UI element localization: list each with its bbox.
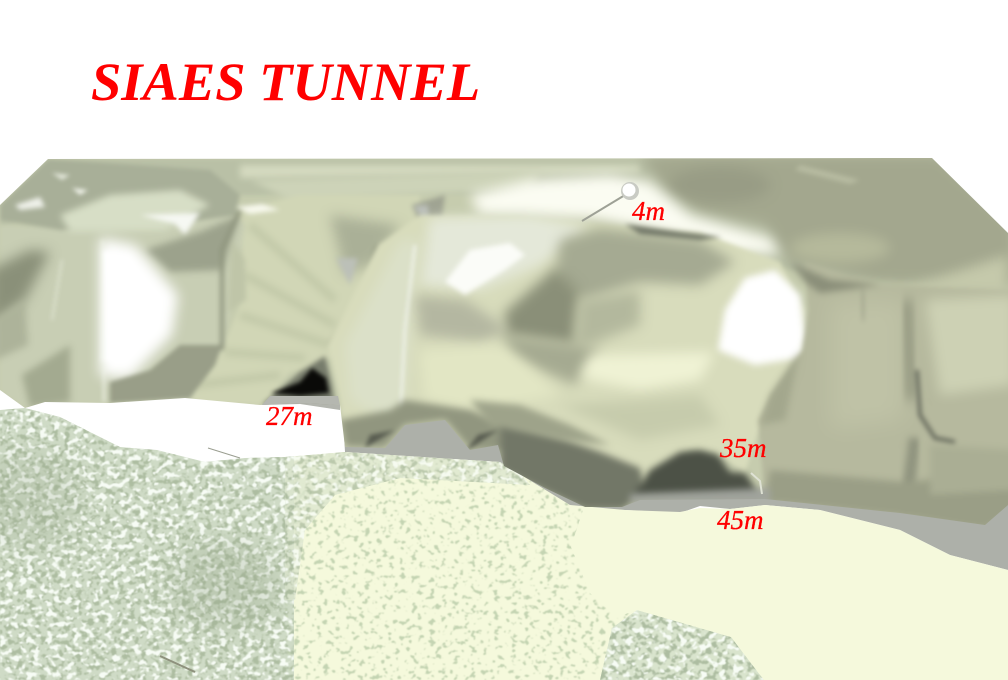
right block shaded left edge [760, 350, 800, 425]
stripe [240, 315, 330, 345]
rock formation with tunnel [0, 150, 1008, 530]
plateau light corner [924, 254, 1008, 289]
stripe [250, 225, 335, 300]
right block [758, 262, 1008, 530]
cave lip highlight [751, 473, 762, 494]
seafloor: mottled vegetation texture [0, 400, 770, 680]
upper edge of dark band [470, 400, 610, 445]
depth label: 45m: 45m [717, 505, 764, 535]
vertical white crack [102, 240, 104, 402]
lower left dark [22, 345, 70, 408]
middle shade patch [575, 290, 640, 345]
bright band across saddle [470, 175, 780, 255]
tunnel entrance dark shade [262, 356, 335, 405]
top surface streak lower [259, 175, 533, 196]
big central rock [328, 215, 805, 507]
lower shaded wedge [505, 335, 600, 385]
title: SIAES TUNNEL [91, 51, 480, 112]
marker stem [582, 195, 625, 221]
gray-blue pocket 2 inner [414, 204, 430, 216]
top band of dense texture over sand [285, 445, 535, 605]
overlap panel edge [228, 240, 246, 312]
lower-left flank [0, 300, 28, 360]
lump speckle [600, 614, 762, 680]
lump highlight [602, 610, 764, 680]
dark vertical cleft [917, 370, 955, 442]
mid cream area [420, 345, 560, 410]
stripe [225, 352, 305, 358]
bottom-right dense lump [600, 610, 764, 680]
seafloor shadow under rock [342, 400, 1008, 570]
band base [285, 445, 535, 605]
lower cleft band [905, 438, 915, 512]
plateau lighter patch [790, 233, 890, 263]
depth label: 27m: 27m [266, 401, 312, 431]
white notch [236, 204, 280, 214]
snow fleck 3 [72, 188, 88, 195]
tunnel entrance black [271, 368, 329, 396]
lighter lower middle [580, 352, 715, 390]
stripe [245, 275, 335, 325]
middle section stripes [195, 225, 335, 385]
light left strip [345, 240, 420, 430]
bright vertical panel [100, 238, 178, 378]
snow fleck 4 [52, 173, 70, 180]
dense dark speckle [0, 400, 294, 680]
dark fold [505, 268, 580, 345]
floor under 27m tunnel [262, 396, 340, 405]
upper right shade [145, 215, 240, 272]
lower right shade [110, 345, 222, 403]
dark ledge [625, 224, 722, 240]
white crack [400, 245, 415, 425]
stripe [195, 375, 280, 385]
right block mid light [830, 300, 905, 430]
stray line on seabed [160, 656, 195, 672]
band dark speckle [285, 445, 535, 605]
top surface streak [240, 165, 640, 178]
upper cleft [862, 290, 864, 320]
lower mid shade [560, 395, 720, 440]
feet detail left [365, 430, 395, 448]
shadow under plateau [790, 262, 880, 293]
ridge crack [330, 245, 378, 345]
middle section [190, 195, 420, 405]
marker: 4m probe [582, 182, 639, 221]
rock base dark band left [340, 400, 505, 450]
depth label: 35m: 35m [719, 433, 766, 463]
band white speckle [285, 453, 528, 600]
darker vegetation zone [170, 540, 280, 630]
plateau streak [798, 166, 856, 184]
block right edge [222, 210, 240, 350]
lump base [600, 610, 764, 680]
grey band [415, 295, 510, 342]
marker ball [621, 182, 639, 200]
dark vertical cleft soft [906, 300, 912, 400]
dense texture base [0, 400, 294, 680]
left block [0, 215, 245, 408]
gray-blue pocket 2 [411, 194, 446, 217]
central rock upper light area [420, 215, 590, 290]
gray floor under 27m tunnel [262, 396, 340, 410]
rock painting [0, 150, 1008, 530]
sparse speckle [285, 440, 765, 680]
35m cave opening [632, 450, 762, 498]
rock base colour [0, 150, 1008, 530]
marker ball highlight [622, 184, 636, 196]
bright vertical core [101, 250, 155, 362]
rock base dark band [500, 420, 645, 510]
central upper shade bar [555, 228, 735, 300]
upper surface highlight [60, 190, 210, 232]
dense white speckle [0, 400, 294, 680]
snow fleck 2 [15, 197, 45, 210]
plateau darker upper [674, 172, 762, 198]
white glint upper [445, 243, 525, 295]
lower dark band [765, 470, 1008, 530]
right block light panel [925, 295, 1008, 395]
depth label: 4m: 4m [632, 196, 665, 226]
cave floor haze [630, 488, 770, 503]
right plateau [640, 155, 1008, 285]
dark left flank [0, 250, 50, 325]
gray-blue pocket 1 [339, 256, 358, 281]
middle upper shaded patch [330, 215, 400, 275]
bright highlight right [718, 270, 805, 365]
top surface band [106, 160, 790, 268]
seafloor: pale sand plain [285, 452, 1008, 680]
stray line at seabed edge [208, 448, 240, 458]
lower right panel [930, 445, 1008, 495]
dark vegetation zone left [0, 450, 80, 550]
left block upper surface [0, 159, 240, 230]
feet detail right [465, 430, 498, 452]
snow fleck 1 [140, 213, 200, 235]
narrow left crack [52, 260, 62, 320]
